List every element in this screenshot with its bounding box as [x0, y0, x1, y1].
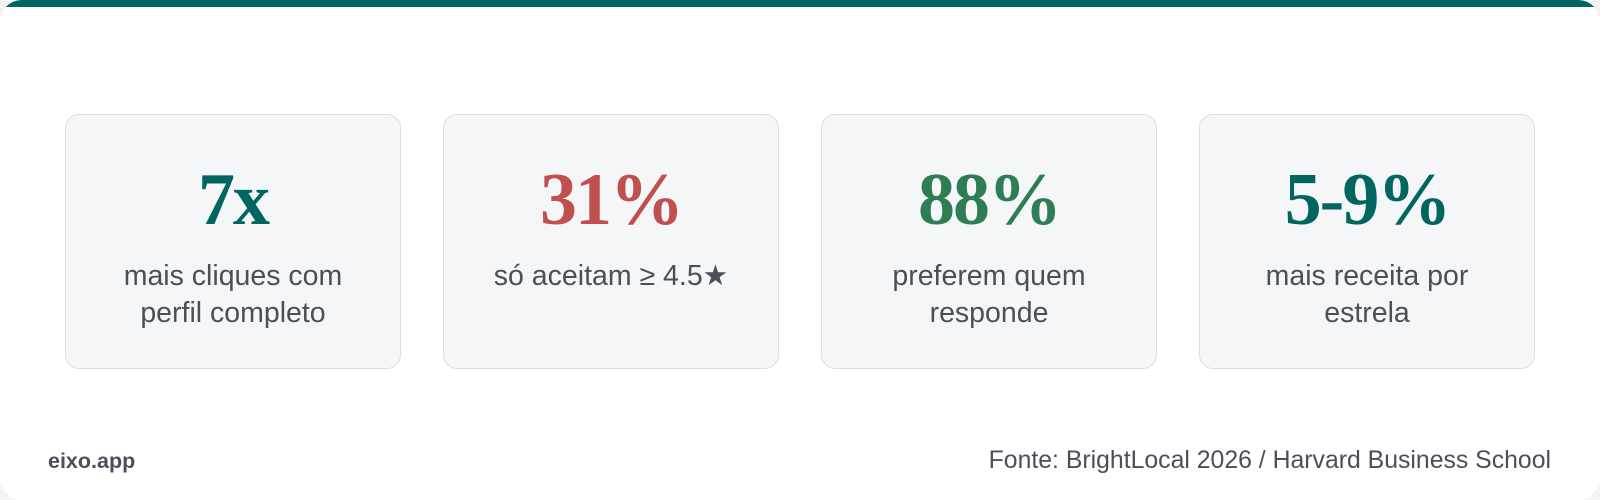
label: 88% [892, 260, 1086, 328]
label: 7x: mais cliques com [124, 260, 342, 292]
card: 31% [443, 114, 779, 369]
card: 88% [821, 114, 1157, 369]
label: 88%: responde [930, 296, 1048, 328]
stat: 88%: 88% [918, 159, 1060, 241]
label: 7x [124, 260, 342, 328]
footer source: Fonte: BrightLocal 2026 / Harvard Business School [989, 447, 1551, 474]
label: 5-9% [1266, 260, 1468, 328]
card: 7x [65, 114, 401, 369]
label: 7x: perfil completo [140, 296, 326, 328]
label: 31%: só aceitam ≥ 4.5★ [494, 260, 728, 292]
label: 88%: preferem quem [892, 260, 1086, 292]
stat: 31%: 31% [540, 159, 682, 241]
card: 5-9% [1199, 114, 1535, 369]
label: 5-9%: estrela [1324, 296, 1410, 328]
stat: 5-9%: 5-9% [1285, 159, 1449, 241]
footer brand: eixo.app [48, 449, 135, 473]
stat: 7x: 7x [198, 159, 268, 241]
label: 5-9%: mais receita por [1266, 260, 1468, 292]
